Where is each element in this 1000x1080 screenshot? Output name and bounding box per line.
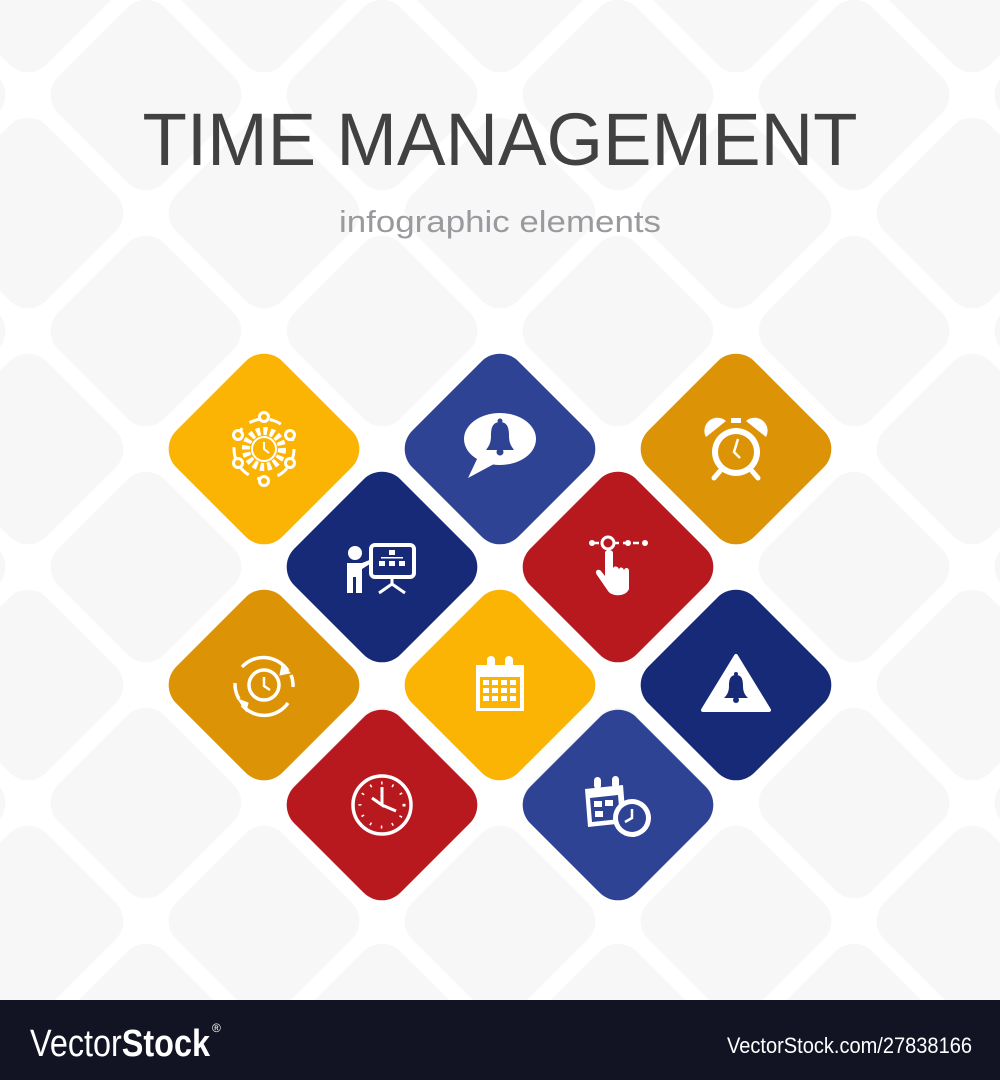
icon: bell speech bubble bbox=[464, 413, 536, 478]
diamond: warning bell bbox=[630, 579, 842, 791]
icon: clock bbox=[353, 776, 411, 834]
diamond: timeline hand bbox=[512, 461, 724, 673]
icon: triangle with bell bbox=[703, 656, 769, 710]
icon: touch timeline bbox=[589, 537, 648, 595]
icon: calendar bbox=[476, 656, 524, 711]
icon: presenter with chart board bbox=[347, 545, 414, 593]
footer url: VectorStock.com/27838166 bbox=[727, 1033, 972, 1058]
icon: schedule bbox=[585, 776, 651, 837]
icon: gear with clock bbox=[234, 412, 294, 486]
title: TIME MANAGEMENT bbox=[142, 98, 858, 181]
footer bar: ® bbox=[212, 1021, 221, 1035]
diamond: bell in speech bubble bbox=[394, 343, 606, 555]
diamond: calendar with clock bbox=[512, 699, 724, 911]
subtitle: infographic elements bbox=[339, 204, 661, 239]
diamond: cycle clock bbox=[158, 579, 370, 791]
diamond: presentation board bbox=[276, 461, 488, 673]
footer bar bbox=[0, 1000, 1000, 1080]
diamond: calendar bbox=[394, 579, 606, 791]
footer logo: VectorStock bbox=[30, 1023, 211, 1065]
icon: clock with circular arrows bbox=[235, 657, 293, 715]
diamond: wall clock bbox=[276, 699, 488, 911]
diamond: alarm clock bbox=[630, 343, 842, 555]
icon: alarm clock bbox=[704, 418, 768, 478]
diamond: gear clock network bbox=[158, 343, 370, 555]
